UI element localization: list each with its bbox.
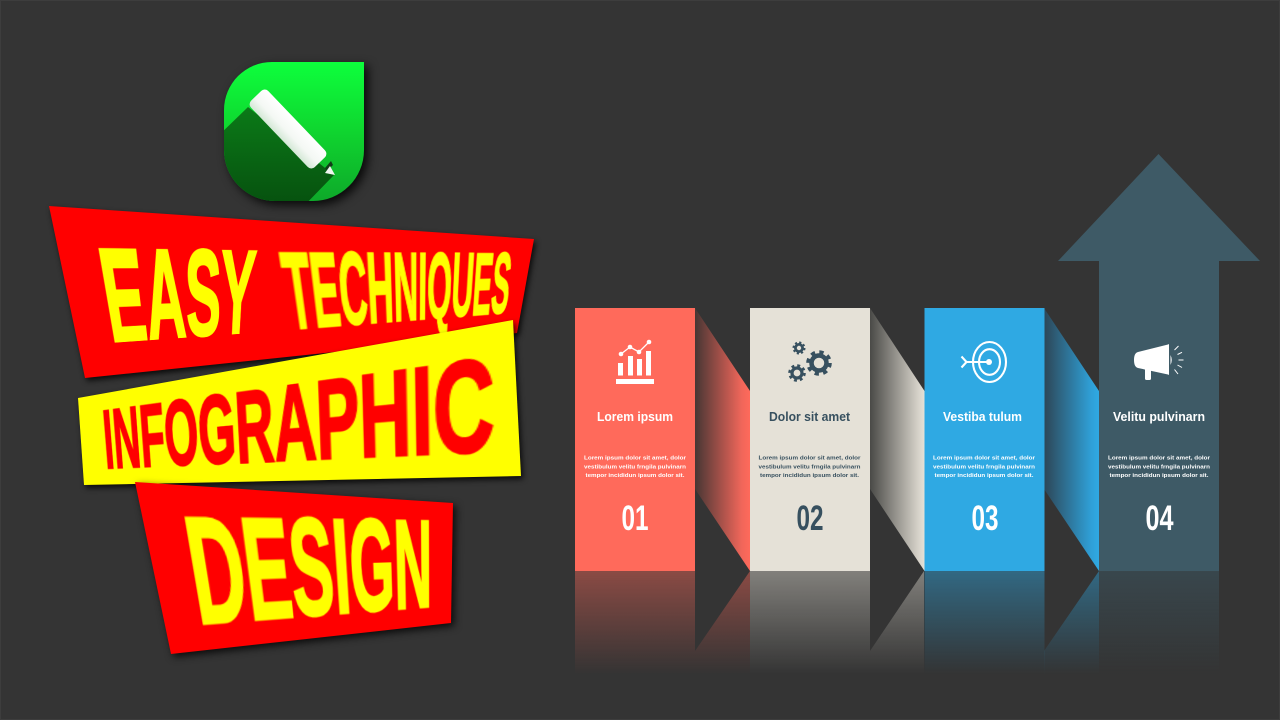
step body text: Lorem ipsum dolor sit amet, dolor xyxy=(584,456,687,462)
step body text: tempor incididun ipsum dolor sit. xyxy=(760,473,859,479)
panel: step 02 xyxy=(750,308,870,571)
icon: target with arrow xyxy=(962,342,1006,382)
icon: gears xyxy=(790,343,830,380)
heading word: EASY: EASY xyxy=(85,205,351,497)
step body text xyxy=(758,456,861,479)
heading word: DESIGN: DESIGN xyxy=(170,472,594,720)
text: TECHNIQUES xyxy=(269,221,736,479)
step body text: vestibulum velitu frngila pulvinarn xyxy=(758,464,861,470)
step body text: tempor incididun ipsum dolor sit. xyxy=(586,473,685,479)
step body text: tempor incididun ipsum dolor sit. xyxy=(934,473,1034,479)
step body text: vestibulum velitu frngila pulvinarn xyxy=(1108,464,1211,470)
step body text: Lorem ipsum dolor sit amet, dolor xyxy=(758,456,861,462)
step body text: Lorem ipsum dolor sit amet, dolor xyxy=(933,456,1036,462)
reflections below the steps xyxy=(575,571,1219,675)
step number: 03 xyxy=(972,499,998,538)
step body text: Lorem ipsum dolor sit amet, dolor xyxy=(1108,456,1211,462)
step title: Lorem ipsum xyxy=(597,410,673,424)
step body text xyxy=(584,456,687,479)
step body text: tempor incididun ipsum dolor sit. xyxy=(1110,473,1209,479)
panel: step 01 xyxy=(575,308,695,571)
fold connector 2 xyxy=(870,308,924,571)
step body text: vestibulum velitu frngila pulvinarn xyxy=(584,464,687,470)
step body text: vestibulum velitu frngila pulvinarn xyxy=(933,464,1036,470)
step body text xyxy=(1108,456,1211,479)
step title: Dolor sit amet xyxy=(769,410,851,424)
panel: step 04 up arrow xyxy=(1058,154,1260,571)
banner: infographic xyxy=(78,199,525,493)
step number: 02 xyxy=(796,499,824,538)
step title: Velitu pulvinarn xyxy=(1113,410,1205,424)
fold connector 1 xyxy=(695,308,750,571)
step body text xyxy=(933,456,1036,479)
step number: 04 xyxy=(1146,499,1174,538)
step number: 01 xyxy=(622,499,648,538)
logo icon: green leaf with pencil xyxy=(224,62,372,210)
icon: bar chart xyxy=(616,340,654,384)
banner: easy techniques xyxy=(49,205,736,497)
icon: megaphone xyxy=(1134,344,1184,380)
fold connector 3 xyxy=(1044,308,1099,571)
panel: step 03 xyxy=(924,308,1044,571)
banner: design xyxy=(134,472,594,720)
step title: Vestiba tulum xyxy=(943,410,1022,424)
